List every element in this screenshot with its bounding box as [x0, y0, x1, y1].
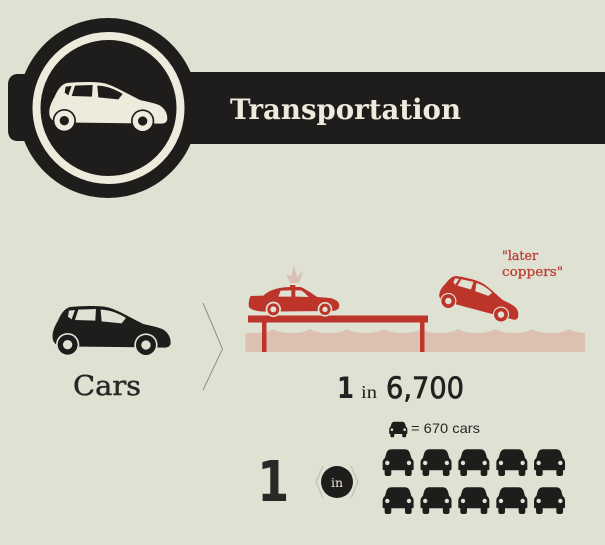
- legend: 670 cars: [389, 420, 480, 437]
- statistic: 1 in 6,700: 1: [337, 371, 354, 405]
- pictogram: ten car icons: [383, 449, 565, 514]
- icon: header car badge: [18, 18, 198, 198]
- big number: 1: 1: [257, 450, 289, 515]
- badge: in: [316, 466, 358, 498]
- statistic: 1 in 6,700: in: [361, 382, 377, 402]
- arrow: chevron divider: [203, 303, 222, 390]
- jumping car: [436, 272, 524, 327]
- caption: later coppers: "later: [502, 249, 539, 264]
- caption: later coppers: coppers": [502, 265, 563, 280]
- label: Cars: Cars: [73, 371, 141, 402]
- statistic: 1 in 6,700: [337, 371, 464, 405]
- legend: 670 cars: = 670 cars: [411, 420, 480, 436]
- icon: black car: [53, 306, 171, 357]
- pier: [248, 316, 428, 352]
- illustration: cop car, pier and jumping car: [246, 249, 585, 352]
- header band: [8, 72, 605, 144]
- statistic: 1 in 6,700: 6,700: [386, 371, 464, 405]
- heading: Transportation: Transportation: [230, 93, 461, 126]
- water: [246, 329, 585, 352]
- flashing light: [286, 265, 303, 283]
- badge: in: in: [331, 475, 343, 490]
- police car: [249, 285, 339, 317]
